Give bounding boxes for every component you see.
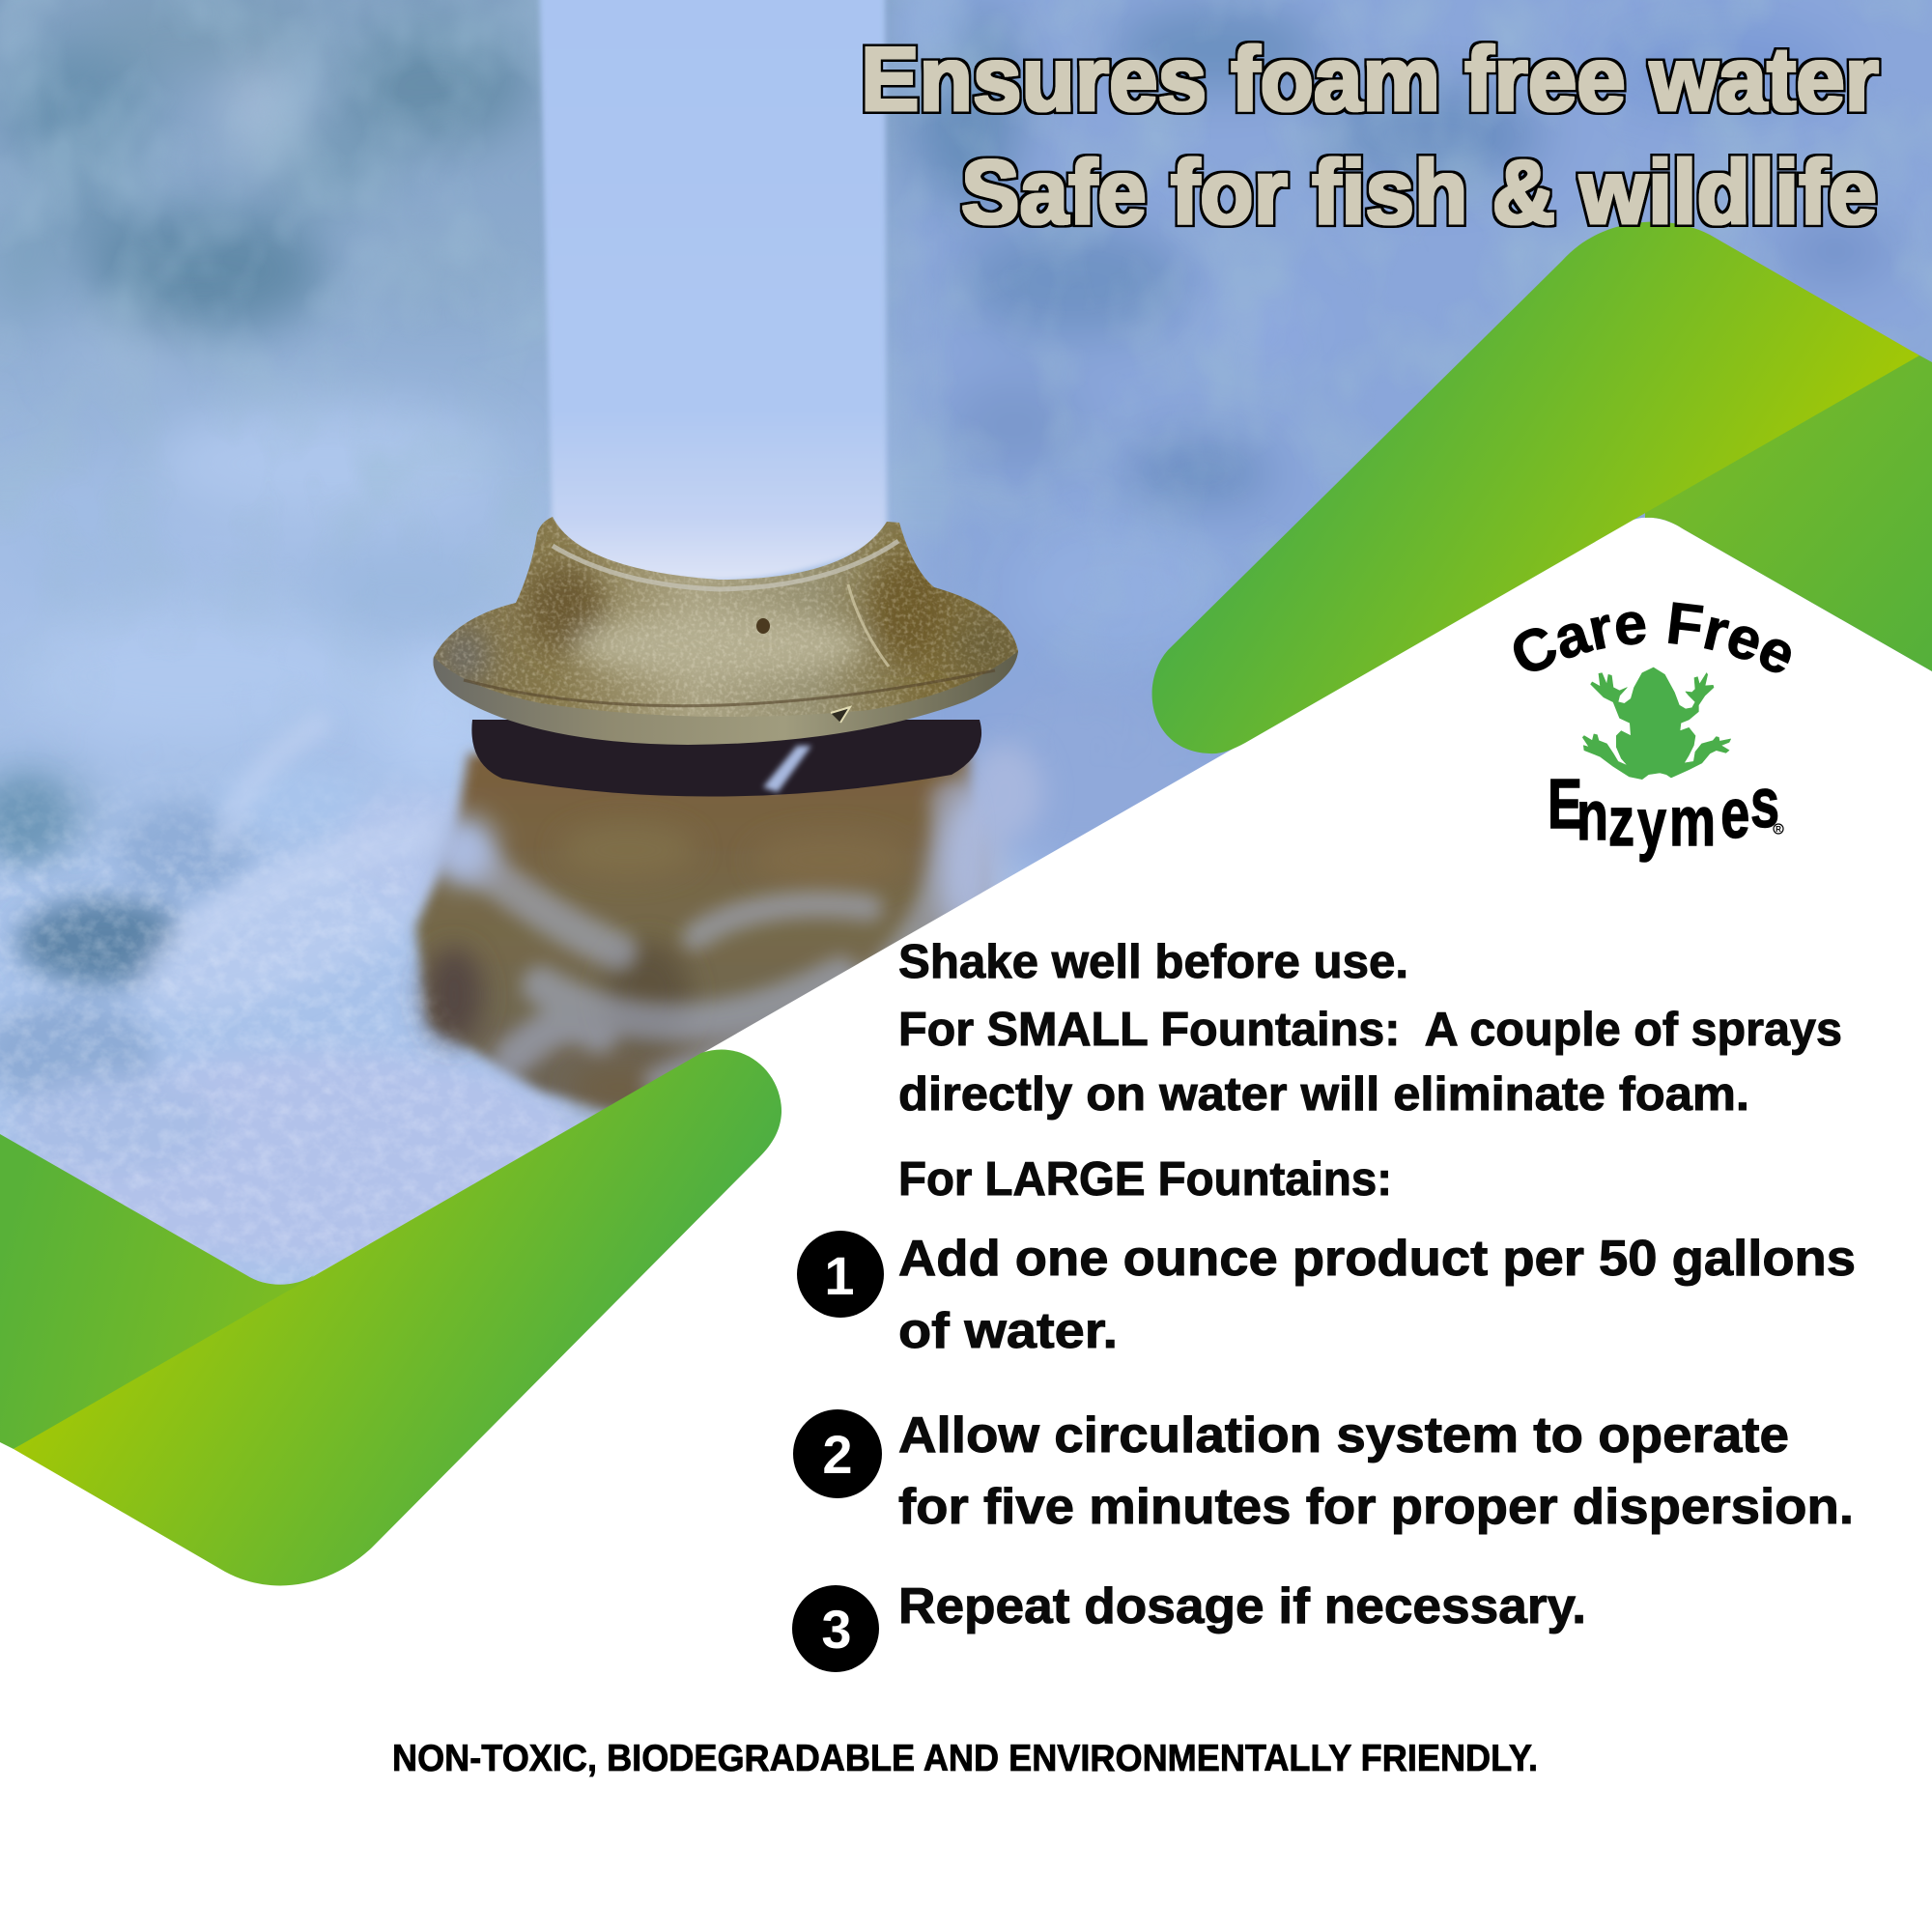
foam and splashes in foreground [0, 768, 599, 1265]
collar lip [553, 541, 898, 589]
line: large fountains: For LARGE Fountains: [898, 1153, 1392, 1206]
registered mark [1774, 824, 1783, 834]
water wisps over brass [454, 802, 954, 1082]
water jet column [539, 0, 887, 581]
headline [861, 28, 1879, 242]
water streak across gap [763, 746, 811, 792]
green chevron: top right light band [1152, 222, 1919, 753]
photo: water fountain jet and brass nozzle [0, 0, 1932, 1352]
step number badge 1: 1 [824, 1245, 855, 1306]
dark gap under flange [471, 720, 981, 797]
logo: Care Free Enzymes [1513, 602, 1791, 863]
white content chevron [0, 518, 1932, 1932]
line: small fountains 1: For SMALL Fountains: A couple of sprays [898, 1004, 1842, 1056]
line: small fountains 2: directly on water will eliminate foam. [898, 1068, 1749, 1121]
rim highlight [464, 670, 995, 706]
step number badge 1 [797, 1231, 884, 1318]
step number badge 2: 2 [822, 1424, 853, 1485]
step 2 text: for five minutes for proper dispersion. [898, 1479, 1854, 1535]
splash foam highlights [193, 724, 425, 932]
step 2 text: Allow circulation system to operate [898, 1407, 1789, 1463]
background water blur: left side [0, 0, 531, 855]
step number badge 3 [792, 1585, 879, 1672]
step 3 text: Repeat dosage if necessary. [898, 1578, 1586, 1634]
step 1 text: Add one ounce product per 50 gallons [898, 1231, 1856, 1287]
background water blur: right side [894, 0, 1932, 879]
flange rim [434, 651, 1018, 745]
instructions text [898, 936, 1856, 1634]
footer statement: NON-TOXIC, BIODEGRADABLE AND ENVIRONMENTALLY FRIENDLY. [392, 1738, 1538, 1779]
green chevron: bottom left light band [14, 1049, 781, 1585]
logo text: Care Free: Care Free [1513, 602, 1791, 672]
step number badge 2 [793, 1409, 882, 1498]
brass flange [425, 512, 1029, 753]
step number badge 3: 3 [821, 1599, 852, 1660]
step 1 text [898, 1231, 1856, 1359]
foam texture [0, 796, 559, 1285]
registered mark: R [1776, 825, 1781, 834]
brass shadows [425, 744, 1043, 1108]
flange pit [756, 618, 770, 634]
step 1 text: of water. [898, 1303, 1118, 1359]
logo text: Enzymes: Enzymes [1548, 765, 1779, 863]
flange shading and speckle [435, 518, 1018, 717]
green chevron: bottom left dark band [0, 1134, 314, 1449]
lower brass body under the water [415, 744, 1043, 1111]
step 2 text [898, 1407, 1854, 1535]
green chevron: top right dark band [1645, 352, 1932, 671]
soft water mottling [0, 0, 1932, 520]
headline line 1: Ensures foam free water [861, 28, 1879, 129]
line: shake well: Shake well before use. [898, 936, 1408, 988]
flange seam [848, 584, 889, 667]
headline line 2: Safe for fish & wildlife [961, 141, 1877, 242]
logo icon: green frog [1582, 668, 1731, 780]
rim burr [831, 707, 850, 723]
